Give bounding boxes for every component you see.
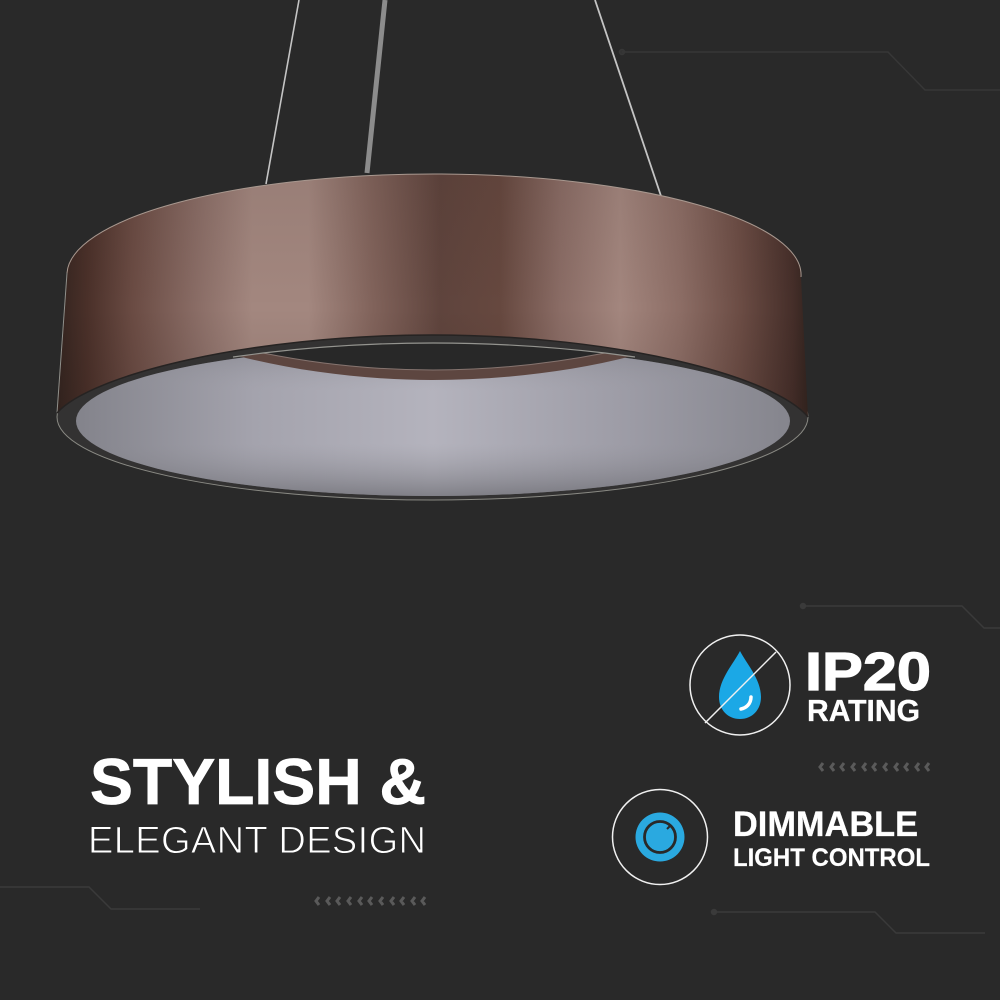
circuit line: top right [620,50,1000,90]
IP20 rating text [805,642,931,728]
dimmable text: DIMMABLE [733,805,918,844]
band edge highlights [57,174,808,417]
circuit line: bottom right [712,910,985,933]
circuit line: middle right [800,604,1000,628]
title line 1: STYLISH & [90,745,426,818]
IP20 rating text: RATING [807,693,920,728]
chevron row: under title [316,897,425,905]
pendant lamp [57,174,808,500]
icon: IP20 no water [690,635,790,735]
IP20 rating text: IP20 [805,642,931,702]
title line 2: ELEGANT DESIGN [88,820,426,862]
icon: dimmable knob [612,790,708,884]
lamp outer band [57,174,808,417]
circuit line: bottom left [0,887,200,909]
dimmable text [733,805,930,872]
title [88,745,426,862]
dimmable text: LIGHT CONTROL [733,844,930,872]
lamp central opening [233,343,635,380]
lamp diffuser [76,346,790,496]
band shading [57,174,808,417]
chevron row: between features [820,763,929,771]
lamp rim [57,334,808,500]
suspension cords [266,0,661,196]
